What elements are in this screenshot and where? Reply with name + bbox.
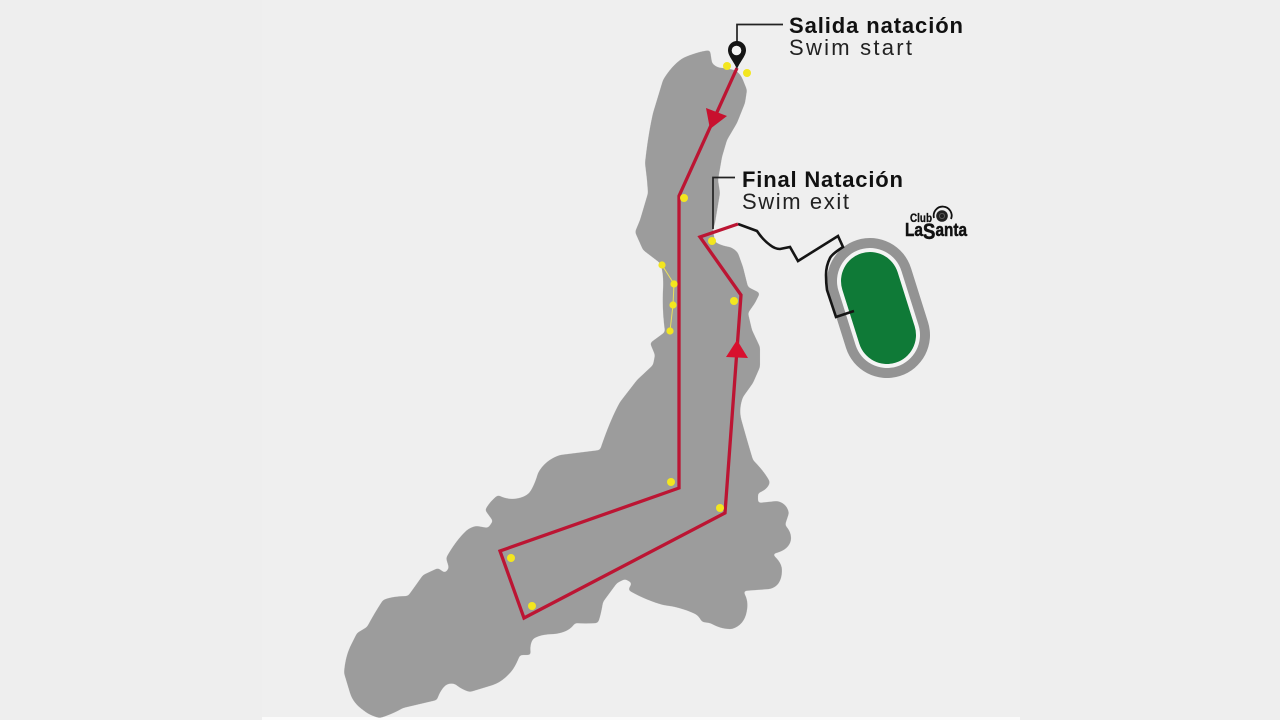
label: swim start [789,13,963,60]
red swim route [500,68,741,618]
black run path from swim exit to stadium [738,224,854,317]
yellow course markers [507,62,751,610]
label: swim exit: Final Natación [742,167,903,192]
logo: Club La Santa: anta [935,220,968,240]
label: swim exit: Swim exit [742,189,849,214]
stadium track [870,281,887,335]
icon: swim start pin [728,41,746,69]
lagoon map shape [344,50,791,718]
label: swim start: Salida natación [789,13,963,38]
arrow: swim direction up [726,340,748,358]
buoy line between yellow markers [662,265,674,331]
logo: Club La Santa: Club [910,211,932,225]
logo: Club La Santa: La [905,220,926,240]
arrow: swim direction down [706,108,727,129]
label: swim start: Swim start [789,35,912,60]
label: swim exit [742,167,903,214]
swim exit leader line [713,178,735,229]
logo: Club La Santa [905,207,968,244]
logo: Club La Santa: S [923,219,935,244]
swim start leader line [737,24,783,44]
